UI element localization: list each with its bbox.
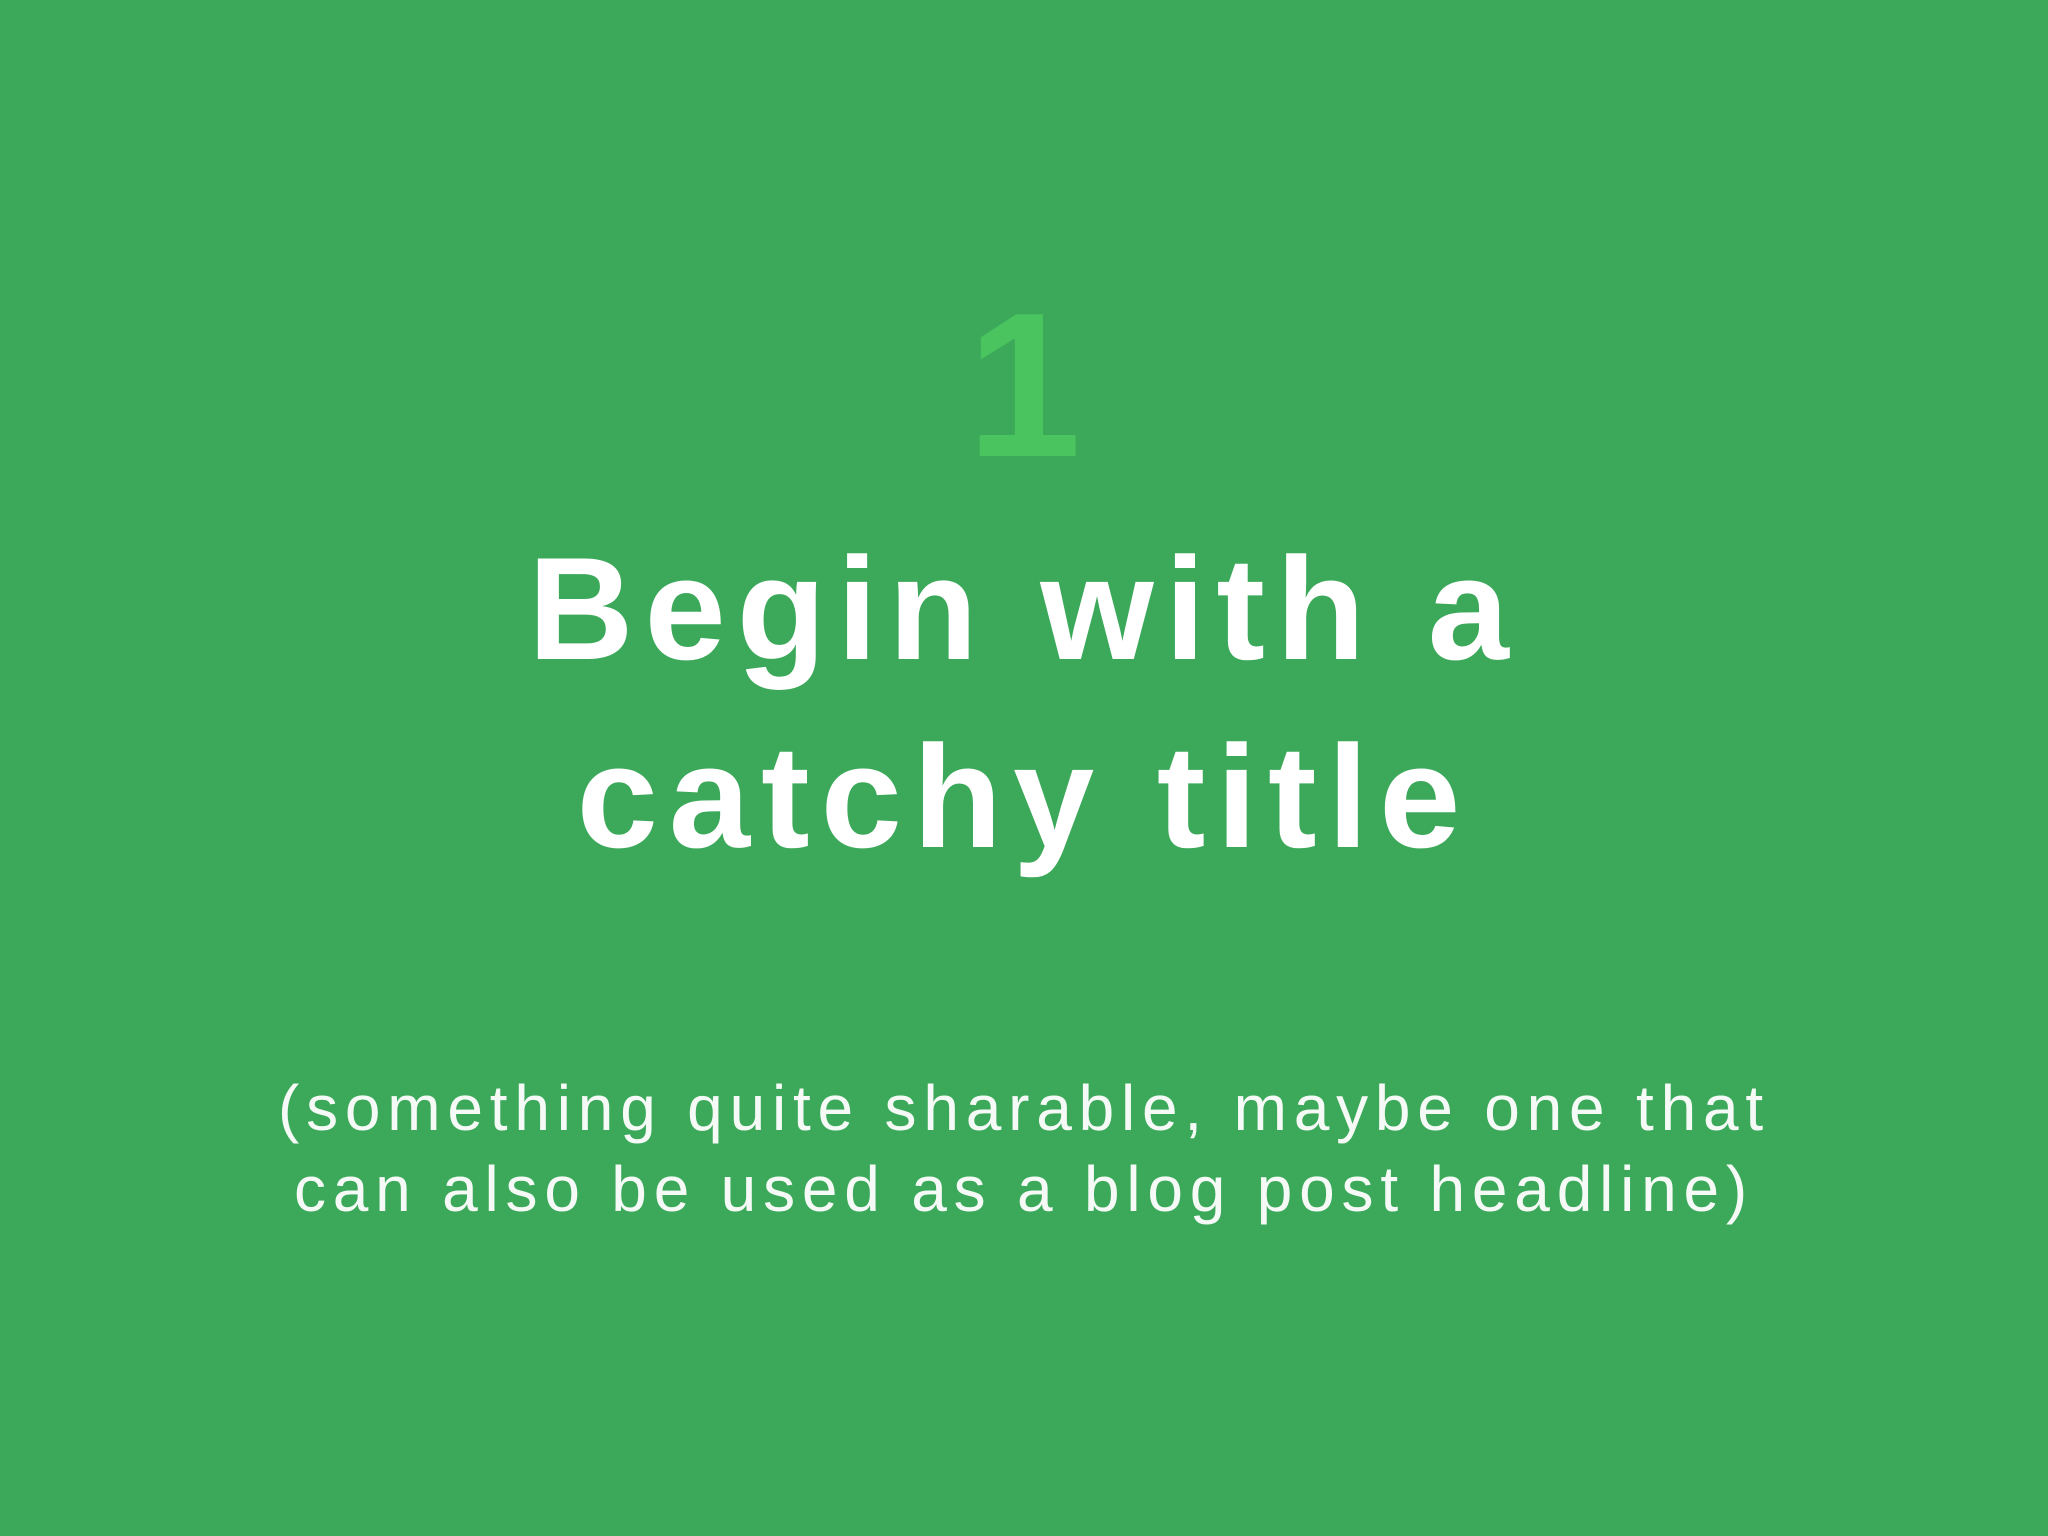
subtitle — [278, 1072, 1770, 1225]
title: Begin with a — [528, 527, 1520, 690]
title: catchy title — [577, 715, 1471, 878]
subtitle: can also be used as a blog post headline) — [294, 1153, 1754, 1225]
number: 1 — [967, 270, 1081, 500]
subtitle: (something quite sharable, maybe one that — [278, 1072, 1770, 1144]
title — [528, 527, 1520, 878]
